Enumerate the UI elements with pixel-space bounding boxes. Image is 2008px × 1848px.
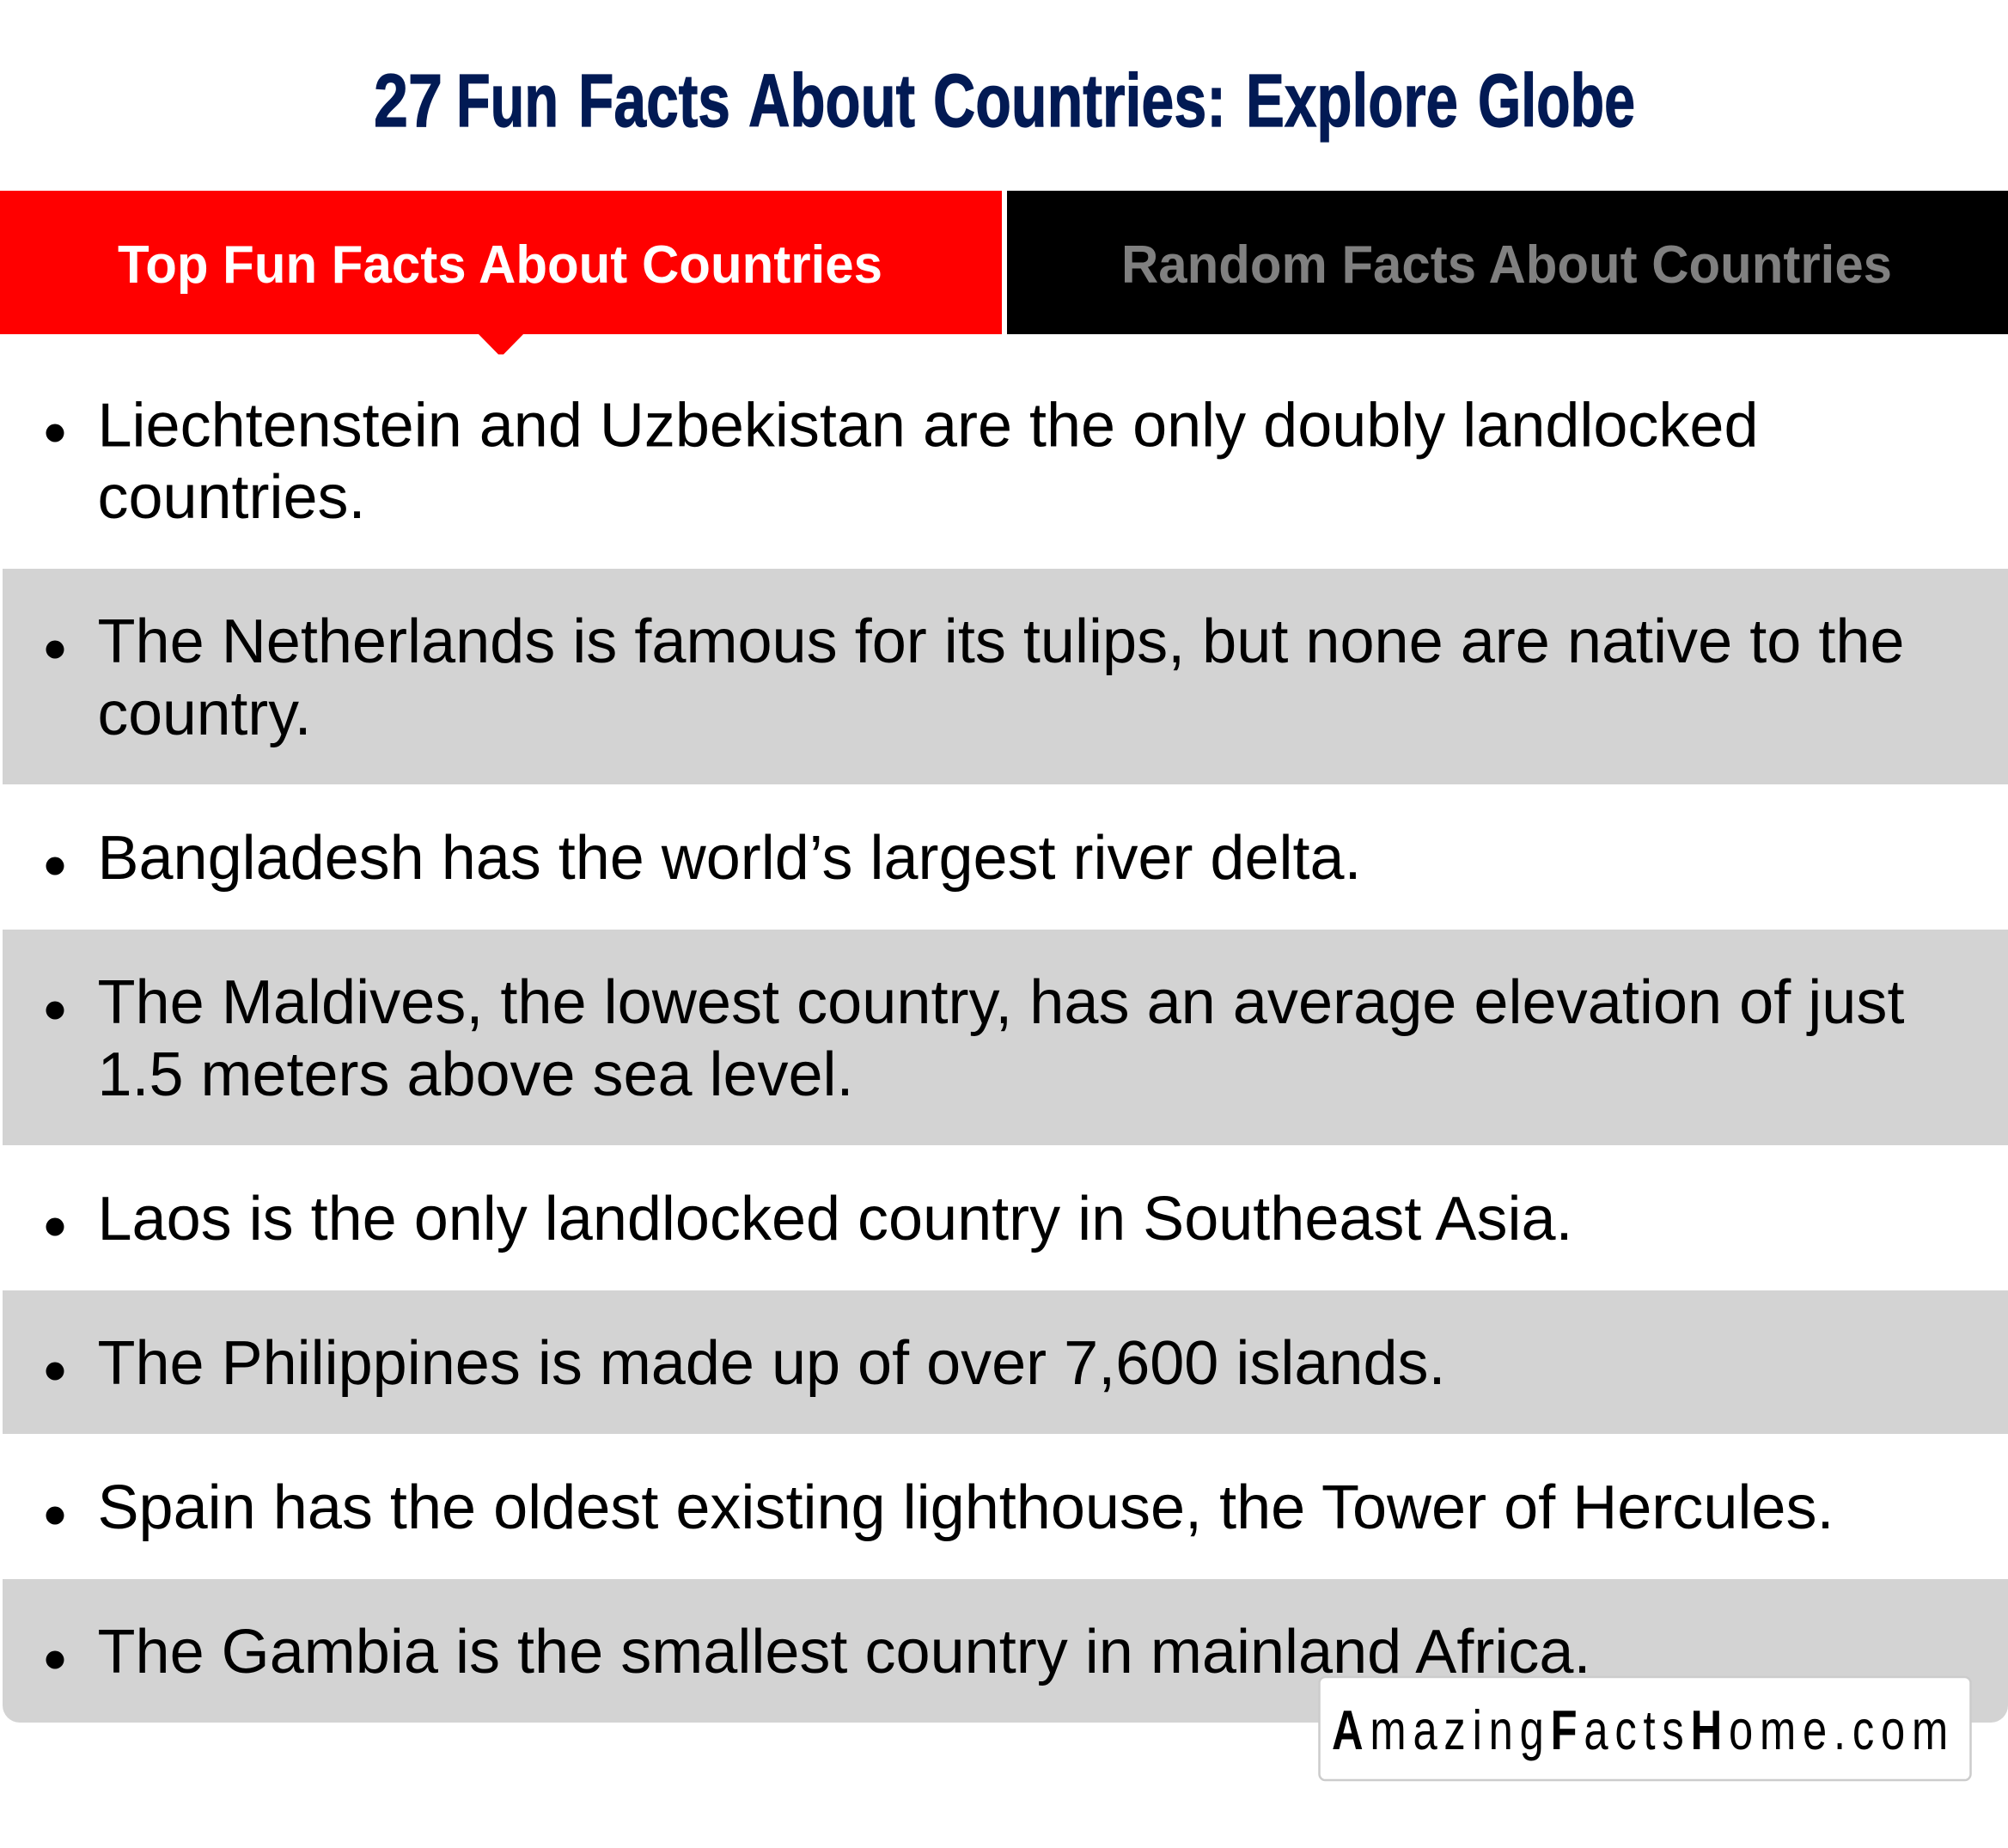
title: Facts xyxy=(578,59,730,143)
fact row 6 xyxy=(3,1290,2008,1434)
fact row 2 xyxy=(3,569,2008,784)
fact row 1: Liechtenstein and Uzbekistan are the only doubly landlocked xyxy=(98,392,1758,460)
fact row 8: The Gambia is the smallest country in mainland Africa. xyxy=(98,1618,1591,1686)
fact row 2: The Netherlands is famous for its tulips, but none are native to the xyxy=(98,607,1904,676)
title: About xyxy=(748,59,915,143)
fact row 6: The Philippines is made up of over 7,600 islands. xyxy=(98,1329,1445,1398)
title: Globe xyxy=(1478,59,1635,143)
fact row 4: 1.5 meters above sea level. xyxy=(98,1040,854,1109)
fact row 2: country. xyxy=(98,680,311,748)
fact row 1: countries. xyxy=(98,463,366,532)
fact row 4: The Maldives, the lowest country, has an average elevation of just xyxy=(98,968,1904,1037)
tab label: random facts: Random Facts About Countries xyxy=(1121,235,1892,295)
watermark badge xyxy=(1320,1677,1971,1780)
fact row 4 xyxy=(3,930,2008,1145)
title: Explore xyxy=(1246,59,1458,143)
fact row 7: Spain has the oldest existing lighthouse, the Tower of Hercules. xyxy=(98,1473,1834,1542)
fact row 8 xyxy=(3,1579,2008,1723)
title: 27 xyxy=(374,59,442,143)
title: Countries: xyxy=(933,59,1226,143)
fact row 5: Laos is the only landlocked country in Southeast Asia. xyxy=(98,1185,1572,1253)
title xyxy=(374,59,1635,143)
panel: active tab xyxy=(0,191,1002,354)
panel: inactive tab xyxy=(1007,191,2008,334)
tab label: top fun facts: Top Fun Facts About Countries xyxy=(118,235,882,295)
watermark text: AmazingFactsHome.com xyxy=(1332,1699,1955,1761)
fact row 1 xyxy=(46,392,1758,532)
fact row 3: Bangladesh has the world’s largest river delta. xyxy=(98,824,1361,893)
title: Fun xyxy=(456,59,558,143)
